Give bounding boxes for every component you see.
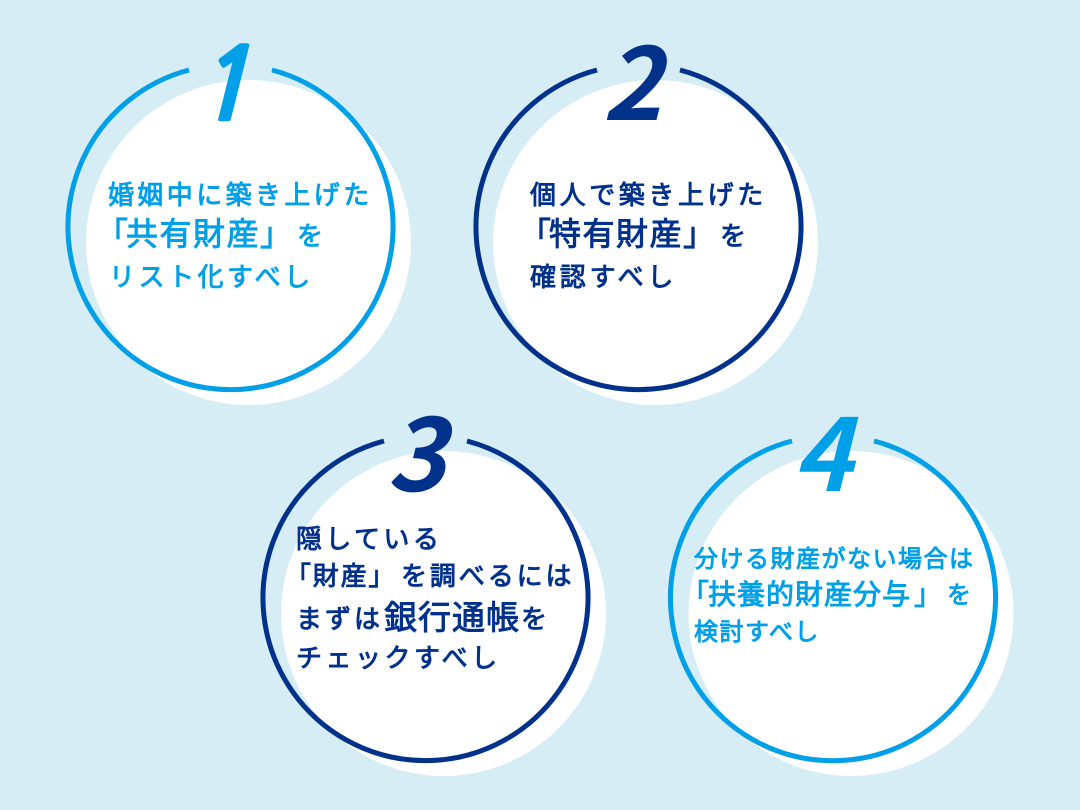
number 3: 3 bbox=[386, 375, 456, 520]
text block 2: 」 bbox=[683, 216, 715, 252]
text block 3 bbox=[285, 524, 574, 673]
number 2: 2 bbox=[602, 4, 670, 149]
text block 1 bbox=[96, 180, 373, 292]
panel: point 3 bbox=[263, 375, 606, 776]
text block 4: 分ける財産がない場合は bbox=[694, 546, 974, 573]
text block 2: 「 bbox=[519, 216, 551, 252]
white disc 2 bbox=[493, 80, 818, 405]
text block 1: 婚姻中に築き上げた bbox=[108, 180, 373, 210]
text block 4 bbox=[681, 546, 974, 646]
ring 2 bbox=[476, 70, 801, 390]
ring 1 bbox=[68, 70, 393, 390]
text block 3: まずは bbox=[296, 604, 383, 634]
text block 4: 」 bbox=[914, 579, 942, 610]
text block 3: 「財産」 bbox=[285, 561, 396, 591]
text block 1: を bbox=[297, 221, 323, 251]
panel: point 2 bbox=[476, 4, 818, 405]
text block 4: 「 bbox=[681, 579, 709, 610]
text block 2: 個人で築き上げた bbox=[530, 180, 767, 210]
white disc 3 bbox=[281, 451, 606, 776]
text block 3: チェックすべし bbox=[296, 643, 501, 673]
panel: point 4 bbox=[670, 375, 1014, 776]
text block 1: 」 bbox=[260, 216, 292, 252]
text block 3: を bbox=[521, 604, 547, 634]
panel: point 1 bbox=[68, 36, 411, 405]
white disc 1 bbox=[86, 80, 411, 405]
number 1: 1 bbox=[192, 36, 252, 135]
text block 3: 銀行通帳 bbox=[384, 599, 520, 636]
text block 1: リスト化すべし bbox=[109, 262, 314, 292]
text block 4: 検討すべし bbox=[694, 619, 820, 646]
text block 4: 扶養的財産分与 bbox=[708, 579, 911, 610]
text block 2: 特有財産 bbox=[549, 216, 683, 252]
text block 4: を bbox=[947, 582, 971, 609]
ring 4 bbox=[670, 441, 996, 761]
white disc 4 bbox=[688, 451, 1014, 776]
text block 1: 「 bbox=[96, 216, 128, 252]
ring 3 bbox=[263, 441, 588, 761]
text block 2 bbox=[519, 180, 767, 292]
text block 2: 確認すべし bbox=[530, 262, 677, 292]
number 4: 4 bbox=[792, 375, 858, 520]
text block 2: を bbox=[720, 221, 746, 251]
text block 3: 隠している bbox=[296, 524, 442, 554]
text block 3: を調べるには bbox=[401, 561, 574, 591]
text block 1: 共有財産 bbox=[126, 216, 260, 252]
